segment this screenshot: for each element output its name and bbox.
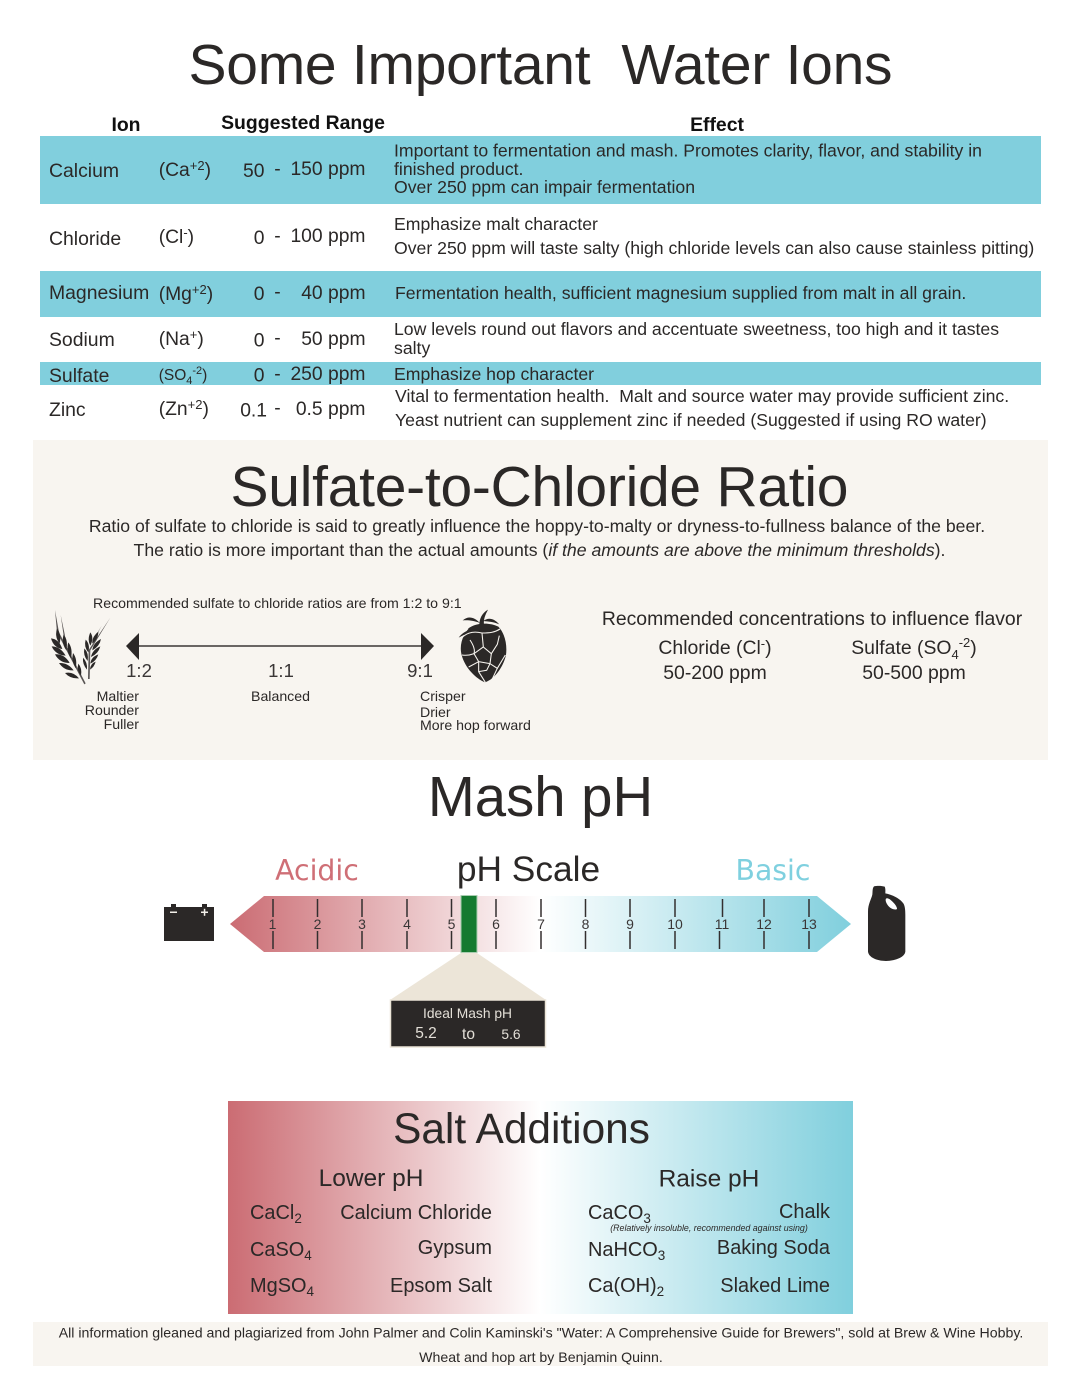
ratio scale labels	[126, 660, 433, 681]
ratio range note: Recommended sulfate to chloride ratios are from 1:2 to 9:1	[93, 595, 462, 611]
row: sulfate	[49, 364, 594, 387]
column: raise pH: Raise pH	[659, 1166, 759, 1192]
panel: salt additions	[228, 1101, 853, 1314]
callout: ideal mash pH: 5.2	[415, 1025, 437, 1042]
scale numbers: 6	[492, 916, 500, 932]
column: raise pH: (Relatively insoluble, recommended against using)	[610, 1223, 808, 1233]
row: sulfate: -	[274, 364, 281, 385]
crisper labels: Crisper	[420, 688, 466, 704]
basic label: Basic	[736, 854, 810, 887]
callout: ideal mash pH: 5.6	[501, 1027, 521, 1042]
row: sodium	[49, 319, 999, 358]
recommended concentrations: )	[765, 637, 772, 659]
pH scale heading: pH Scale	[457, 850, 600, 889]
table header: Effect	[690, 114, 744, 136]
scale numbers: 10	[667, 916, 683, 932]
row: calcium	[49, 140, 982, 197]
column: raise pH: Chalk	[779, 1201, 830, 1223]
row: sodium: )	[197, 329, 204, 350]
column: lower pH	[250, 1165, 492, 1299]
table header: Suggested Range	[221, 112, 385, 134]
row: zinc: -	[274, 398, 281, 419]
scale arrow	[230, 896, 851, 952]
row: calcium: )	[205, 160, 211, 181]
row: magnesium: 40 ppm	[301, 283, 366, 304]
row: magnesium: )	[207, 284, 213, 305]
row: sulfate: -2	[192, 365, 202, 377]
scale ticks	[273, 899, 809, 949]
row: chloride: -	[183, 225, 188, 240]
row: calcium: Calcium	[49, 160, 119, 182]
scale numbers: 12	[756, 916, 772, 932]
row: sodium: 50 ppm	[301, 329, 366, 350]
row: sulfate: 250 ppm	[290, 364, 366, 385]
ratio description: Ratio of sulfate to chloride is said to greatly influence the hoppy-to-malty or dryness-to-fullness balance of the beer.	[89, 516, 985, 536]
recommended concentrations: 50-500 ppm	[862, 662, 966, 684]
crisper labels: More hop forward	[420, 717, 531, 733]
balanced label: Balanced	[251, 688, 310, 704]
panel: water ions table	[40, 112, 1041, 430]
recommended concentrations: 50-200 ppm	[663, 662, 767, 684]
recommended concentrations: )	[970, 637, 977, 659]
row: sulfate: (SO	[159, 367, 186, 384]
scale numbers: 9	[626, 916, 634, 932]
row: magnesium: Fermentation health, sufficient magnesium supplied from malt in all grain.	[395, 283, 966, 303]
recommended concentrations: Sulfate (SO	[851, 637, 951, 659]
row: zinc: (Zn	[159, 399, 188, 420]
column: raise pH: Ca(OH)	[588, 1275, 657, 1297]
recommended concentrations: -	[761, 636, 765, 651]
ratio scale labels: 1:2	[126, 660, 152, 681]
scale numbers: 7	[537, 916, 545, 932]
row: sodium: -	[274, 328, 281, 349]
column: lower pH: MgSO	[250, 1275, 307, 1297]
callout: ideal mash pH: to	[462, 1026, 475, 1043]
chart: pH scale	[164, 850, 905, 1047]
ratio scale labels: 9:1	[407, 660, 433, 681]
row: calcium: 150 ppm	[290, 159, 366, 180]
row: magnesium: Magnesium	[49, 282, 149, 304]
crisper labels: Drier	[420, 704, 451, 720]
icon: battery	[164, 904, 214, 941]
maltier labels: Fuller	[104, 716, 139, 732]
row: magnesium: (Mg	[159, 284, 192, 305]
acidic label: Acidic	[275, 854, 359, 887]
column: raise pH	[588, 1166, 831, 1299]
row: zinc: 0.1	[240, 400, 267, 422]
row: sulfate: 4	[186, 375, 192, 387]
row: chloride: )	[188, 227, 194, 248]
scale numbers: 2	[314, 916, 322, 932]
recommended concentrations: 4	[951, 647, 959, 662]
row: sodium: (Na	[159, 329, 190, 350]
table header	[111, 112, 744, 136]
row: sulfate: 0	[254, 366, 264, 386]
row: zinc: Zinc	[49, 399, 86, 421]
ratio description: The ratio is more important than the actual amounts (if the amounts are above the minimum thresholds).	[134, 540, 945, 560]
row: sodium: +	[190, 327, 197, 342]
ratio description	[89, 516, 985, 560]
icon: wheat	[51, 610, 110, 684]
row: calcium: +2	[190, 158, 205, 173]
crisper labels	[420, 688, 531, 733]
row: zinc	[49, 386, 1009, 430]
row: zinc: Yeast nutrient can supplement zinc if needed (Suggested if using RO water)	[395, 410, 987, 430]
heading: mash pH: Mash pH	[428, 765, 653, 828]
icon: jug	[868, 886, 905, 961]
column: lower pH: Calcium Chloride	[340, 1202, 492, 1224]
column: lower pH: CaCl	[250, 1202, 294, 1224]
scale numbers: 5	[448, 916, 456, 932]
row: zinc: 0.5 ppm	[296, 399, 366, 420]
row: calcium: Important to fermentation and mash. Promotes clarity, flavor, and stability in	[394, 140, 982, 160]
row: sodium: Low levels round out flavors and accentuate sweetness, too high and it tastes	[394, 319, 999, 339]
scale numbers: 13	[801, 916, 817, 932]
column: raise pH: 3	[658, 1248, 665, 1263]
scale numbers: 4	[403, 916, 411, 932]
title: Some Important Water Ions	[188, 33, 892, 97]
row: sulfate: )	[202, 367, 207, 384]
column: raise pH: Slaked Lime	[720, 1275, 830, 1297]
row: chloride: Over 250 ppm will taste salty (high chloride levels can also cause stainless pitting)	[394, 238, 1034, 258]
row: calcium: (Ca	[159, 160, 190, 181]
recommended concentrations	[602, 608, 1023, 684]
row: sulfate: Sulfate	[49, 365, 109, 387]
row: chloride: (Cl	[159, 227, 183, 248]
callout: ideal mash pH: Ideal Mash pH	[423, 1006, 512, 1021]
row: chloride: Emphasize malt character	[394, 214, 598, 234]
row: magnesium: +2	[192, 282, 207, 297]
column: lower pH: CaSO	[250, 1239, 304, 1261]
scale numbers	[269, 916, 817, 932]
column: lower pH: Epsom Salt	[390, 1275, 492, 1297]
row: calcium: finished product.	[394, 159, 523, 179]
row: sodium: 0	[254, 330, 264, 352]
row: magnesium	[49, 282, 966, 305]
row: chloride: 100 ppm	[290, 226, 366, 247]
column: lower pH: 4	[307, 1284, 315, 1299]
ideal mash pH marker	[461, 896, 477, 952]
column: raise pH: 3	[643, 1211, 651, 1226]
panel: sulfate-to-chloride ratio	[33, 440, 1048, 760]
row: chloride: Chloride	[49, 228, 121, 250]
column: lower pH: 4	[304, 1248, 312, 1263]
recommended concentrations: Chloride (Cl	[658, 637, 761, 659]
row: magnesium: -	[274, 282, 281, 303]
column: raise pH: CaCO	[588, 1202, 643, 1224]
column: raise pH: NaHCO	[588, 1239, 658, 1261]
panel: footer credits: Wheat and hop art by Benjamin Quinn.	[419, 1349, 663, 1365]
heading: salt additions: Salt Additions	[393, 1105, 650, 1152]
table header: Ion	[111, 114, 141, 136]
row: zinc: Vital to fermentation health. Malt and source water may provide sufficient zinc.	[395, 386, 1009, 406]
row: calcium: -	[274, 159, 281, 180]
row: sulfate: Emphasize hop character	[394, 364, 594, 384]
scale numbers: 3	[358, 916, 366, 932]
maltier labels	[85, 688, 139, 732]
row: chloride: 0	[254, 228, 264, 249]
row bands	[40, 136, 1041, 385]
row: calcium: Over 250 ppm can impair fermentation	[394, 177, 695, 197]
ratio scale labels: 1:1	[268, 660, 294, 681]
maltier labels: Maltier	[97, 688, 139, 704]
row: chloride: -	[274, 226, 281, 247]
row: sodium: salty	[394, 338, 430, 358]
column: lower pH: 2	[294, 1211, 302, 1226]
row: zinc: +2	[188, 397, 202, 412]
scale numbers: 8	[582, 916, 590, 932]
heading: sulfate-to-chloride ratio: Sulfate-to-Chloride Ratio	[230, 455, 848, 519]
row: calcium: 50	[243, 161, 264, 182]
recommended concentrations: -2	[959, 635, 970, 650]
column: raise pH: 2	[657, 1284, 664, 1299]
panel: footer credits	[33, 1322, 1048, 1366]
column: raise pH: Baking Soda	[717, 1237, 831, 1259]
row: chloride	[49, 214, 1034, 258]
row: magnesium: 0	[254, 284, 264, 305]
recommended concentrations: Recommended concentrations to influence flavor	[602, 608, 1023, 630]
scale numbers: 11	[715, 916, 729, 932]
column: lower pH: Gypsum	[418, 1237, 492, 1259]
callout pointer	[390, 953, 546, 1000]
callout: ideal mash pH	[390, 1000, 546, 1047]
ratio arrow	[126, 633, 434, 660]
row: sodium: Sodium	[49, 329, 115, 351]
row: zinc: )	[202, 399, 209, 420]
panel: footer credits: All information gleaned and plagiarized from John Palmer and Colin Kaminski's "Water: A Comprehensive Guide for Brewers", sold at Brew & Wine Hobby.	[59, 1324, 1023, 1340]
scale numbers: 1	[269, 916, 277, 932]
icon: hop	[459, 610, 506, 682]
maltier labels: Rounder	[85, 702, 139, 718]
column: lower pH: Lower pH	[319, 1165, 423, 1192]
